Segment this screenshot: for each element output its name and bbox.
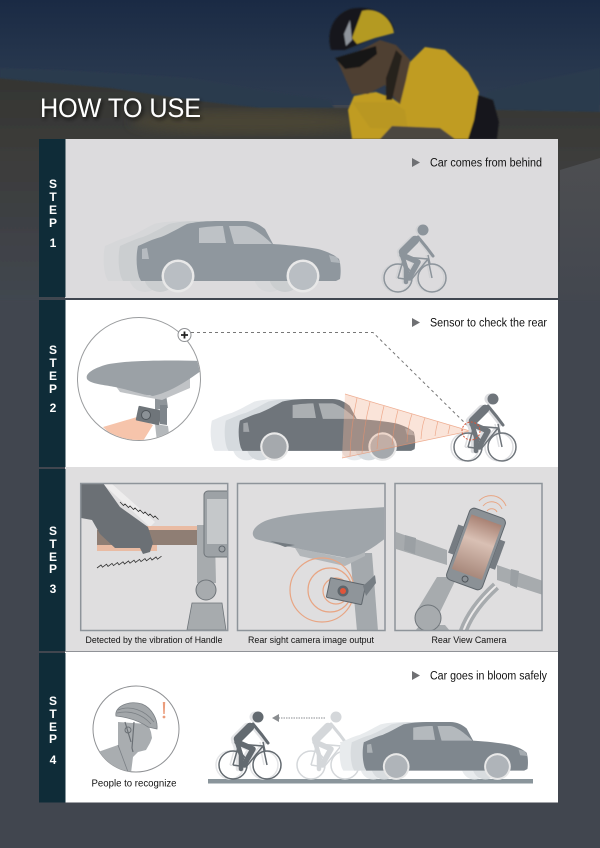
step 1 sidebar: 1 — [50, 236, 57, 250]
step 2 sidebar: E — [49, 369, 57, 383]
zoom circle: saddle with sensor — [78, 318, 205, 442]
car moving with motion trail — [104, 221, 341, 292]
step 1 sidebar: S — [49, 177, 57, 191]
vibration zigzags — [97, 502, 162, 568]
step 4 caption: Car goes in bloom safely — [430, 670, 547, 682]
frame captions — [86, 635, 507, 646]
frame: phone view — [395, 484, 543, 632]
plus marker — [178, 328, 191, 342]
frame: rear camera — [238, 484, 386, 631]
step 2 sidebar: P — [49, 382, 57, 396]
signal arcs — [479, 496, 506, 512]
step 3 sidebar: E — [49, 550, 57, 564]
arrow: cyclist moves ahead — [272, 714, 325, 722]
frame: handle vibration — [81, 483, 234, 630]
cyclist with sensor highlight — [451, 394, 516, 461]
step 2 caption: Sensor to check the rear — [430, 318, 547, 330]
step 3 sidebar — [39, 469, 66, 651]
sensor beam — [342, 394, 470, 458]
step 1 sidebar: T — [49, 190, 57, 204]
frame captions: Rear View Camera — [432, 635, 507, 646]
panel: step 4 — [39, 652, 558, 802]
step 4 sidebar: S — [49, 694, 57, 708]
frame captions: Detected by the vibration of Handle — [86, 635, 222, 646]
road — [208, 779, 533, 784]
step 2 sidebar: T — [49, 356, 57, 370]
step 4 sidebar: 4 — [50, 753, 57, 767]
panel: step 3 — [39, 467, 558, 652]
step 3 sidebar: 3 — [50, 582, 57, 596]
step 1 sidebar: E — [49, 203, 57, 217]
step 4 sidebar — [39, 653, 66, 802]
step 2 sidebar: 2 — [50, 401, 57, 415]
exclamation mark — [163, 702, 165, 718]
step 2 sidebar — [39, 300, 66, 467]
cyclist — [216, 712, 281, 779]
step 1 caption: Car comes from behind — [430, 158, 542, 170]
dashed leader line — [191, 332, 474, 432]
frame captions: Rear sight camera image output — [248, 635, 374, 646]
step 1 sidebar: P — [49, 216, 57, 230]
panel: step 1 — [39, 139, 558, 298]
step 3 sidebar: T — [49, 537, 57, 551]
step 4 sidebar: P — [49, 732, 57, 746]
title: HOW TO USE — [40, 93, 201, 123]
step 3 sidebar: S — [49, 524, 57, 538]
car passing with trail — [340, 722, 528, 780]
step 3 sidebar: P — [49, 562, 57, 576]
car with motion trail — [211, 399, 415, 461]
step 2 sidebar: S — [49, 343, 57, 357]
step 4 sidebar: E — [49, 720, 57, 734]
circle caption: People to recognize — [92, 778, 177, 790]
rider photo — [329, 8, 499, 139]
step 4 sidebar: T — [49, 707, 57, 721]
step 1 sidebar — [39, 139, 66, 297]
cyclist — [382, 224, 446, 292]
circle: rider head with helmet — [93, 686, 179, 773]
cyclist ghost — [297, 712, 359, 779]
panel: step 2 — [39, 300, 558, 467]
